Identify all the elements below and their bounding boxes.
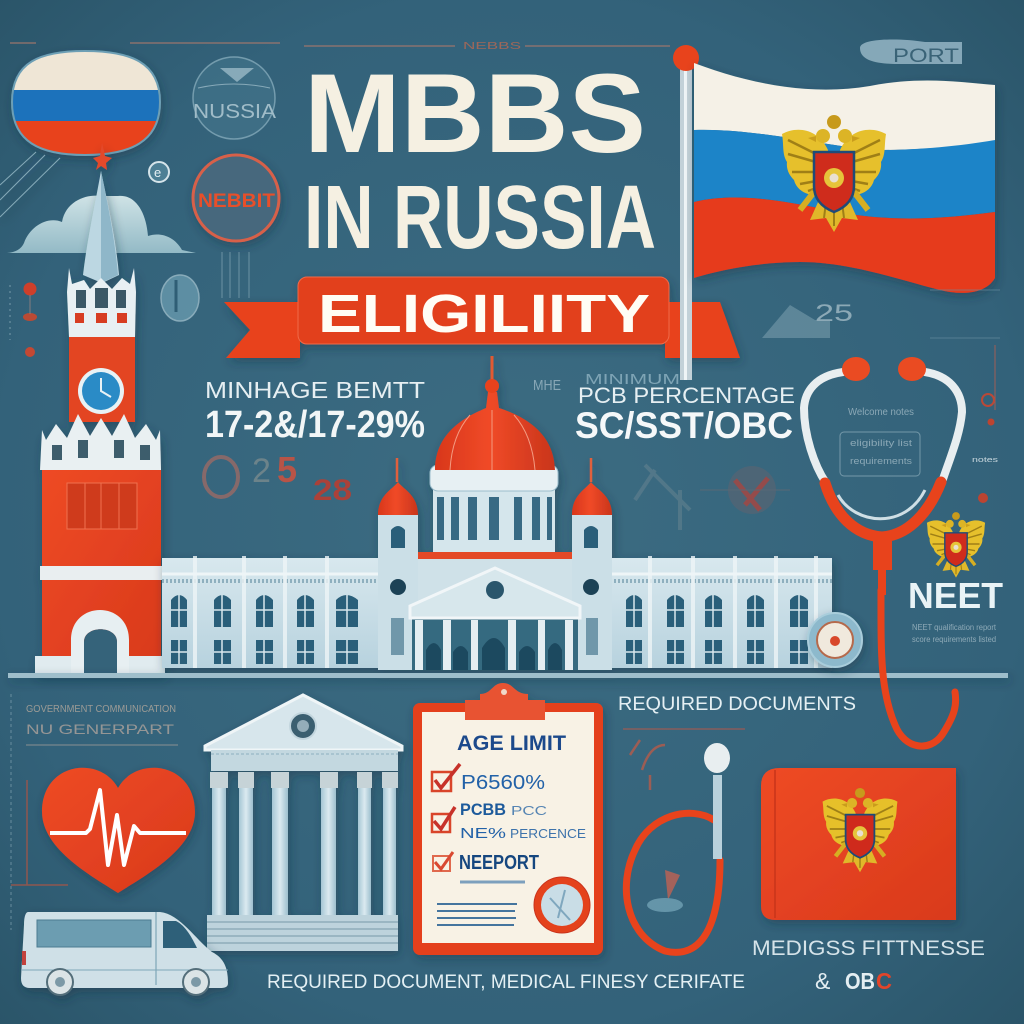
NEET faint caption (912, 623, 997, 644)
faint red numbers: 28 (313, 474, 352, 507)
check item 3 (433, 852, 539, 882)
PCB percentage block: SC/SST/OBC (575, 405, 793, 446)
faint glyphs (533, 377, 790, 530)
portico (412, 618, 578, 670)
stethoscope inner faint text (840, 407, 920, 476)
tower neck (69, 337, 135, 422)
stethoscope (804, 357, 962, 746)
central hall (418, 558, 572, 670)
faint left red ornaments (10, 282, 37, 357)
text lines (437, 904, 517, 925)
faint right red marks: notes (972, 457, 999, 464)
stethoscope inner faint text: Welcome notes (848, 407, 914, 418)
stethoscope chest disk (808, 613, 862, 667)
right wing (610, 558, 832, 668)
spire (83, 171, 119, 283)
medical fitness caption: OB (845, 968, 875, 994)
title (304, 51, 656, 268)
cloud (7, 196, 196, 253)
medical fitness caption (752, 937, 985, 994)
NEET label: NEET (908, 575, 1003, 616)
stethoscope inner faint text: requirements (850, 456, 913, 466)
age limit block: 17-2&/17-29% (205, 404, 425, 446)
speech bubble flag (0, 50, 160, 217)
clip (465, 683, 545, 720)
passport (761, 768, 956, 920)
clock (78, 368, 124, 414)
main dome (435, 392, 555, 470)
left faint caption: NU GENERPART (26, 721, 175, 737)
small icon: coin (149, 162, 169, 182)
ribbon banner: ELIGILIITY (318, 284, 650, 344)
left faint caption: GOVERNMENT COMMUNICATION (26, 704, 176, 715)
emblem: Russia seal (193, 57, 277, 139)
faint marks by tube (623, 729, 745, 912)
small icon: coin: e (154, 165, 161, 180)
flagpole (673, 45, 699, 380)
top faint rules and label: NEBBS (463, 41, 522, 52)
age limit block: MINHAGE BEMTT (205, 377, 425, 403)
checklist heading: AGE LIMIT (457, 732, 566, 755)
required documents label: REQUIRED DOCUMENTS (618, 694, 856, 715)
clipboard checklist (413, 683, 603, 955)
title: IN RUSSIA (304, 168, 656, 268)
badge: NEET: NEBBIT (198, 191, 275, 212)
left faint caption (11, 694, 178, 930)
faint red numbers (204, 449, 352, 507)
arch gate (71, 610, 129, 675)
side towers (378, 515, 418, 670)
small coat of arms (927, 512, 985, 578)
left wing (162, 558, 380, 668)
ambulance van (21, 912, 228, 995)
bottom caption: REQUIRED DOCUMENT, MEDICAL FINESY CERIFATE (267, 972, 745, 993)
temple pillars (205, 695, 402, 951)
stethoscope inner faint text: eligibility list (850, 438, 913, 448)
flag coat of arms (782, 115, 886, 232)
red tube stethoscope (626, 743, 730, 952)
report tag: PORT (893, 46, 959, 67)
tower plinth (35, 656, 165, 675)
Russian flag (694, 63, 995, 293)
medical fitness caption: & (815, 968, 830, 994)
crown band (40, 414, 161, 470)
NEET faint caption: NEET qualification report (912, 623, 997, 632)
PCB percentage block (575, 371, 795, 446)
faint year label (762, 290, 1000, 338)
medical fitness caption: MEDIGSS FITTNESSE (752, 937, 985, 960)
check item 2 (432, 800, 586, 842)
window mullions (171, 595, 808, 664)
tower star (93, 143, 112, 170)
seal stamp (534, 877, 590, 933)
passport emblem (823, 788, 897, 872)
emblem: Russia seal: NUSSIA (193, 101, 277, 123)
age limit block (205, 377, 425, 446)
check item 3: NEEPORT (459, 852, 539, 874)
body (42, 470, 161, 660)
windows (171, 595, 808, 627)
check item 2: PCC (511, 803, 547, 818)
ground line (8, 673, 1008, 678)
icon: faint glass sphere (161, 252, 249, 321)
faint right red marks (972, 345, 999, 503)
faint year label: 25 (815, 300, 853, 327)
faint glyphs: MHE (533, 377, 561, 394)
PCB percentage block: PCB PERCENTAGE (578, 383, 795, 408)
central drum (433, 470, 555, 558)
report tag (860, 40, 962, 67)
Kremlin tower (35, 143, 165, 675)
NEET faint caption: score requirements listed (912, 635, 996, 644)
check item 1: P6560% (461, 772, 545, 794)
faint red numbers: 5 (277, 449, 297, 490)
check item 2: PCBB (460, 800, 506, 819)
title: MBBS (304, 51, 646, 176)
faint red numbers: 2 (252, 452, 271, 490)
PCB percentage block: MINIMUM (585, 371, 680, 388)
heart icon (42, 768, 195, 893)
medical fitness caption: C (876, 968, 892, 994)
check item 1 (432, 764, 545, 794)
badge: NEET (193, 155, 279, 241)
ribbon banner (224, 277, 740, 358)
check item 2: PERCENCE (510, 826, 586, 841)
check item 2: NE% (460, 825, 506, 842)
university building (8, 356, 1008, 678)
upper crown (67, 268, 136, 337)
